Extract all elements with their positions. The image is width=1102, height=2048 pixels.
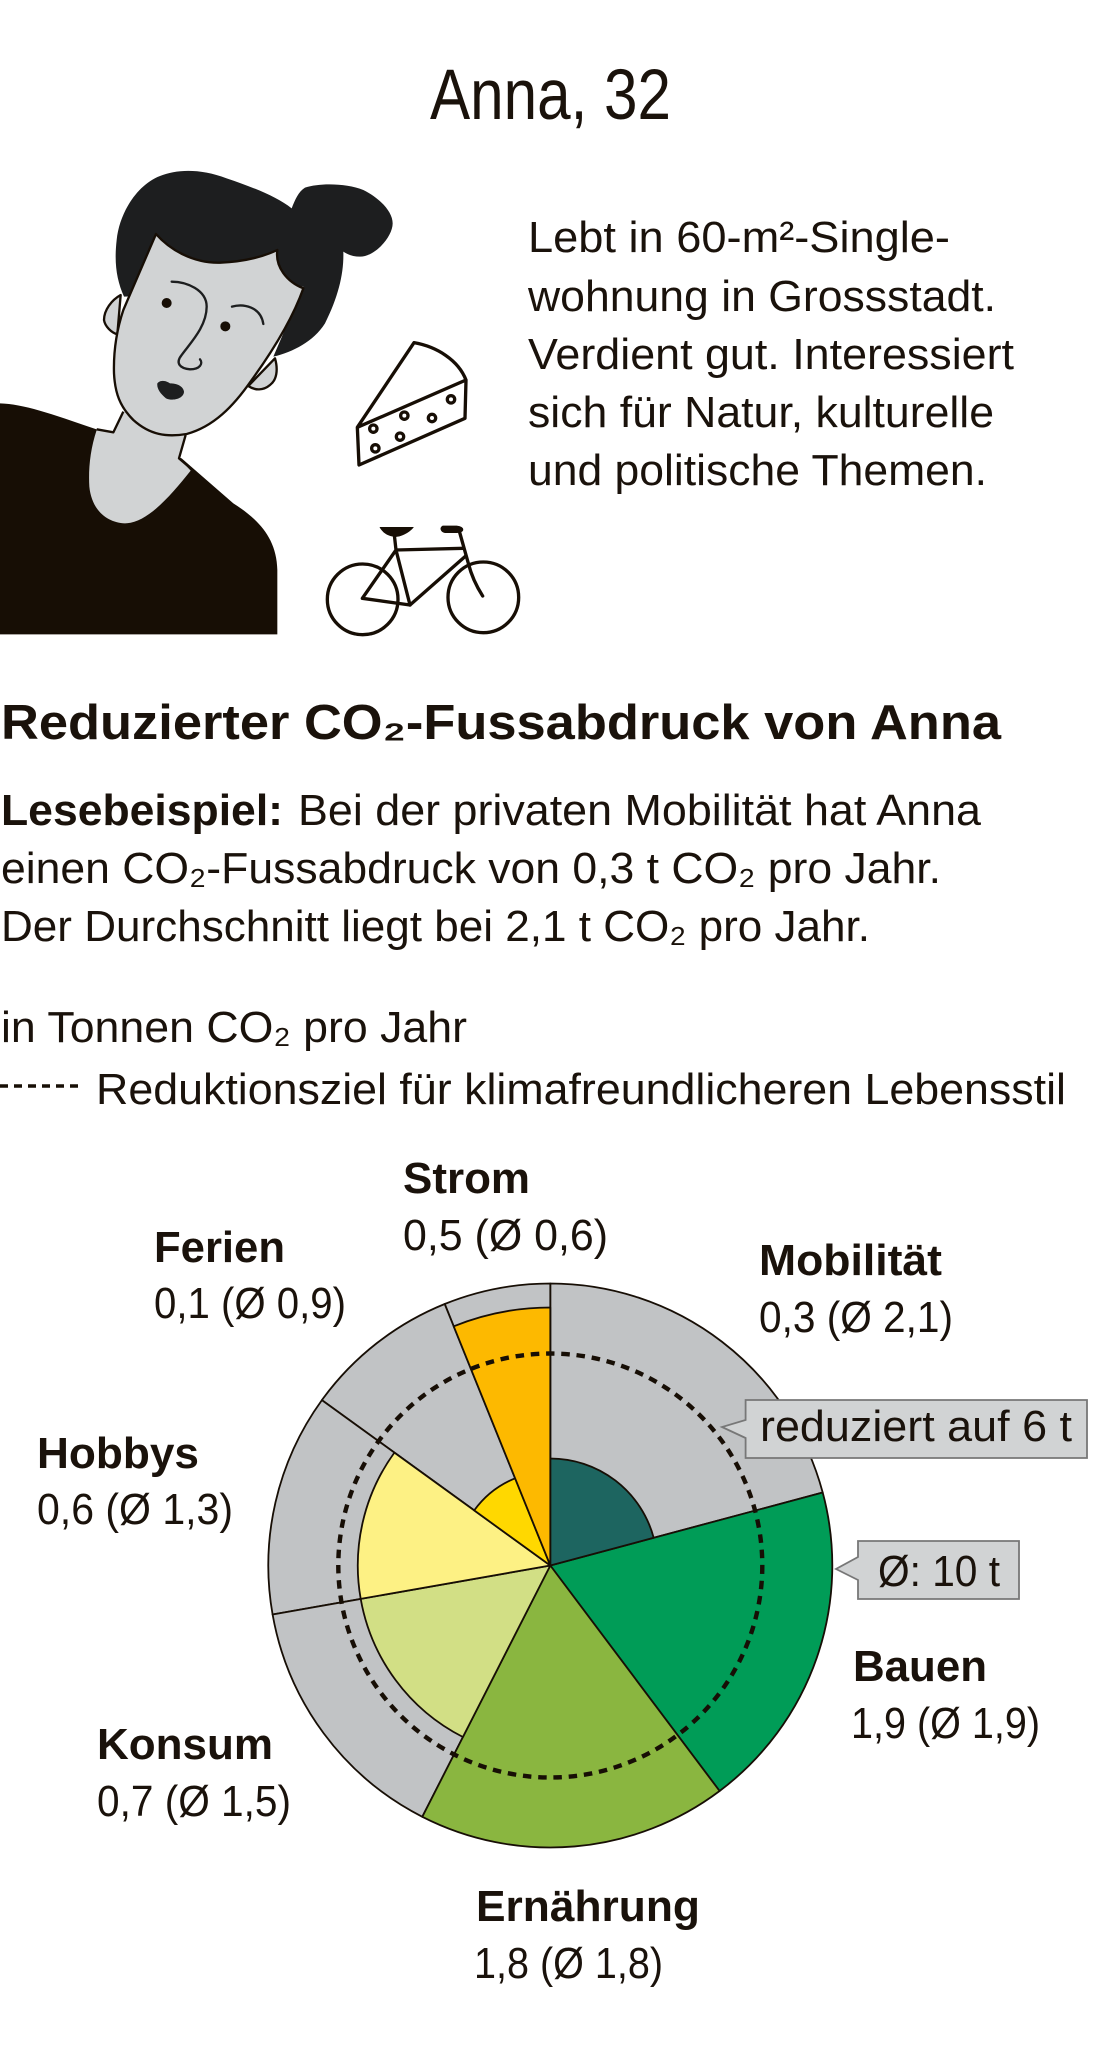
label: Ferien: 0,1 (Ø 0,9) bbox=[154, 1279, 346, 1328]
text block: reading example: Bei der privaten Mobilität hat Anna bbox=[298, 786, 982, 835]
text block: reading example: einen CO₂-Fussabdruck von 0,3 t CO₂ pro Jahr. bbox=[1, 844, 941, 893]
pie chart bbox=[268, 1284, 832, 1848]
label: Hobbys bbox=[37, 1429, 233, 1534]
text block: description of Anna: Lebt in 60-m²-Single- bbox=[528, 213, 950, 262]
label: Bauen: 1,9 (Ø 1,9) bbox=[851, 1699, 1040, 1748]
label: Strom bbox=[403, 1154, 608, 1260]
text block: reading example: Lesebeispiel: bbox=[1, 786, 283, 835]
sector: Konsum bbox=[361, 1566, 550, 1737]
legend: reduction target: Reduktionsziel für klimafreundlicheren Lebensstil bbox=[96, 1065, 1066, 1114]
right ear bbox=[248, 358, 277, 389]
text block: description of Anna: Verdient gut. Interessiert bbox=[528, 330, 1014, 379]
label: Konsum: Konsum bbox=[97, 1720, 273, 1769]
label: Konsum: 0,7 (Ø 1,5) bbox=[97, 1777, 291, 1826]
label: Hobbys: Hobbys bbox=[37, 1429, 199, 1478]
icon: bicycle bbox=[327, 526, 519, 635]
label: Bauen bbox=[851, 1642, 1040, 1748]
title: Anna, 32 bbox=[430, 56, 671, 135]
shirt bbox=[0, 403, 277, 634]
callout: average 10 t bbox=[836, 1541, 1019, 1599]
sector: Bauen bbox=[550, 1492, 832, 1791]
dashed reduction circle bbox=[338, 1354, 762, 1778]
label: Ernährung: Ernährung bbox=[476, 1882, 700, 1931]
label: Bauen: Bauen bbox=[853, 1642, 987, 1691]
mouth bbox=[157, 381, 184, 400]
label: Ernährung: 1,8 (Ø 1,8) bbox=[474, 1939, 663, 1988]
neck outline bbox=[97, 412, 191, 468]
label: Ferien: Ferien bbox=[154, 1223, 285, 1272]
text block: reading example bbox=[1, 786, 982, 951]
label: Strom: Strom bbox=[403, 1154, 530, 1203]
average ring (grey) bbox=[550, 1284, 823, 1566]
left ear bbox=[104, 295, 121, 334]
label: Ernährung bbox=[474, 1882, 700, 1988]
text block: description of Anna: wohnung in Grossstadt. bbox=[527, 272, 996, 321]
text block: description of Anna: und politische Themen. bbox=[528, 446, 987, 495]
nose bbox=[172, 282, 207, 369]
eyebrow bbox=[232, 306, 263, 324]
icon: cheese bbox=[357, 343, 466, 465]
label: Ferien bbox=[154, 1223, 346, 1328]
sector: Strom bbox=[454, 1308, 550, 1566]
label: Mobilität: Mobilität bbox=[759, 1236, 942, 1285]
face bbox=[114, 234, 303, 435]
text block: description of Anna bbox=[527, 213, 1014, 495]
neck bbox=[89, 412, 191, 523]
sector: Ernährung bbox=[422, 1566, 720, 1848]
label: Mobilität: 0,3 (Ø 2,1) bbox=[759, 1293, 953, 1342]
label: Mobilität bbox=[759, 1236, 953, 1342]
illustration: portrait of Anna bbox=[0, 171, 393, 634]
hair bbox=[116, 171, 393, 357]
sector: Mobilität bbox=[550, 1458, 654, 1566]
sector: Hobbys bbox=[358, 1453, 550, 1599]
sector: Ferien bbox=[474, 1478, 550, 1566]
callout: average 10 t: Ø: 10 t bbox=[878, 1547, 1000, 1596]
heading: Reduzierter CO₂-Fussabdruck von Anna bbox=[1, 696, 1002, 750]
label: Konsum bbox=[97, 1720, 291, 1826]
text block: description of Anna: sich für Natur, kulturelle bbox=[528, 388, 994, 437]
callout: reduced to 6 t: reduziert auf 6 t bbox=[760, 1402, 1072, 1451]
unit note: in Tonnen CO₂ pro Jahr bbox=[1, 1003, 467, 1052]
label: Strom: 0,5 (Ø 0,6) bbox=[403, 1211, 608, 1260]
label: Hobbys: 0,6 (Ø 1,3) bbox=[37, 1485, 233, 1534]
eyes bbox=[162, 298, 230, 331]
text block: reading example: Der Durchschnitt liegt bei 2,1 t CO₂ pro Jahr. bbox=[1, 902, 870, 951]
